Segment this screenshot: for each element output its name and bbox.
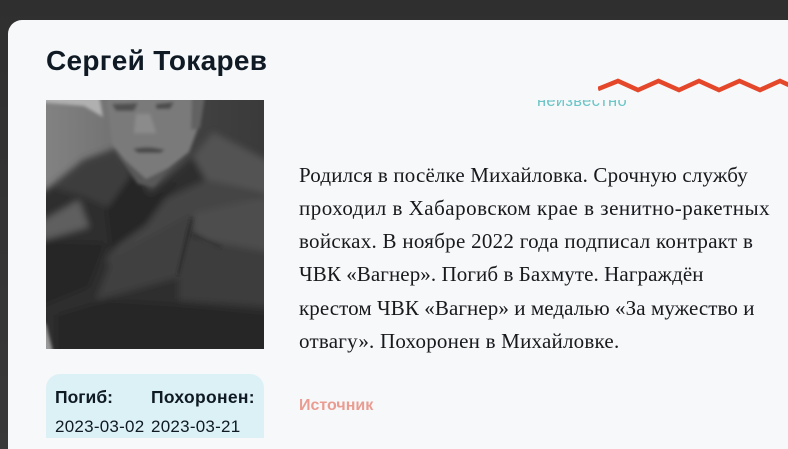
biography text: войсках. В ноябре 2022 года подписал контракт в — [299, 229, 753, 253]
label: died: Погиб: — [55, 387, 113, 407]
burial date: 2023-03-21 — [151, 417, 240, 436]
date of death: 2023-03-02 — [55, 417, 144, 436]
biography text: Родился в посёлке Михайловка. Срочную службу — [299, 163, 748, 187]
biography text: крестом ЧВК «Вагнер» и медалью «За мужество и — [299, 296, 755, 320]
face — [110, 100, 198, 180]
biography text: ЧВК «Вагнер». Погиб в Бахмуте. Награждён — [299, 262, 704, 286]
source link: Источник — [299, 397, 373, 414]
title: Сергей Токарев — [46, 45, 267, 76]
biography text: отвагу». Похоронен в Михайловке. — [299, 329, 619, 353]
label: buried: Похоронен: — [151, 387, 255, 407]
portrait photo — [46, 100, 264, 349]
panel: dates — [46, 374, 264, 438]
zigzag decoration — [598, 78, 788, 92]
biography text: проходил в Хабаровском крае в зенитно-ракетных — [299, 196, 770, 220]
